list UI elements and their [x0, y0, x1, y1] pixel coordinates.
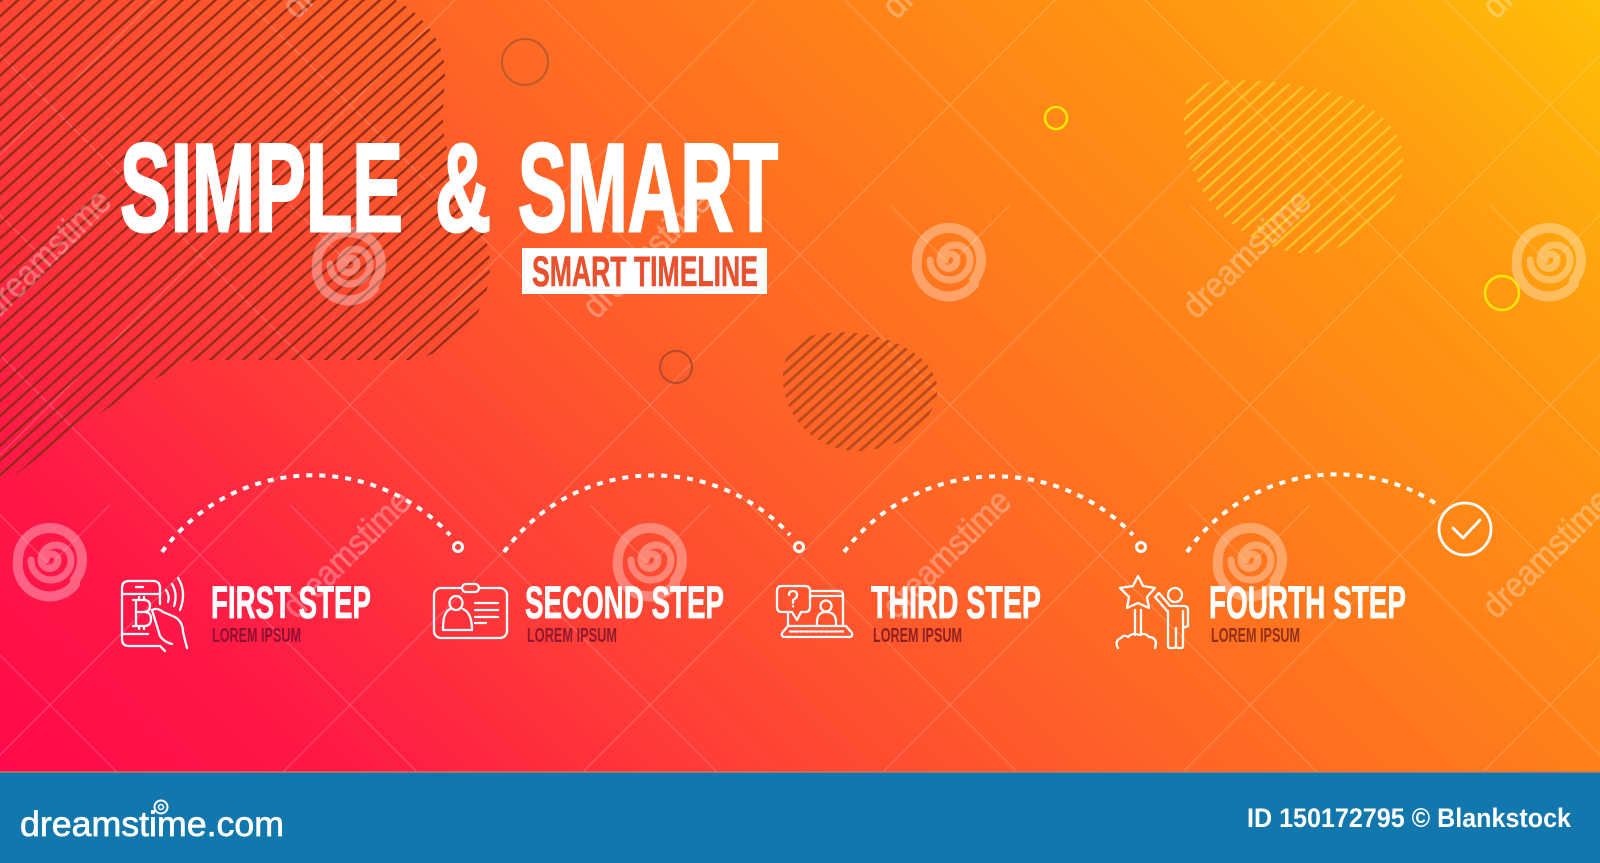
watermark text row: dreamstime — [273, 480, 419, 626]
timeline node 2 — [794, 542, 804, 552]
watermark text row — [0, 0, 1600, 626]
watermark text row: dreamstime — [873, 480, 1019, 626]
timeline node 1 — [454, 542, 462, 552]
timeline dashed arcs — [162, 474, 1441, 552]
step 1 — [122, 577, 371, 651]
heading: second step: SECOND STEP — [525, 577, 724, 628]
icon: bitcoin phone — [122, 578, 187, 651]
footer image id credit: ID 150172795 © Blankstock — [1247, 803, 1572, 833]
hatched blob: large left — [0, 0, 490, 487]
subtitle label: SMART TIMELINE — [532, 248, 758, 296]
caption: second step: LOREM IPSUM — [527, 625, 617, 647]
timeline node 3 — [1136, 542, 1146, 552]
watermark text row: dreamstime — [573, 180, 719, 326]
heading: first step: FIRST STEP — [211, 577, 371, 628]
decorative circle: small yellow — [1045, 107, 1067, 129]
decorative circle: top dark — [502, 39, 548, 85]
step 2 — [434, 577, 724, 647]
title: SIMPLE — [120, 119, 403, 258]
icon: check circle — [1439, 503, 1491, 555]
hatched blob: yellow right — [1184, 80, 1403, 253]
title: SMART — [518, 119, 778, 258]
hatched blob: center — [783, 332, 937, 451]
watermark spirals — [18, 228, 1581, 596]
decorative circle: center dark — [660, 351, 692, 383]
step 3 — [777, 577, 1041, 647]
icon: id card — [434, 584, 507, 638]
decorative circle: large yellow — [1485, 276, 1519, 310]
footer band — [0, 771, 1600, 863]
caption: fourth step: LOREM IPSUM — [1211, 625, 1300, 647]
watermark text row: dreamstime — [1173, 180, 1319, 326]
step 4 — [1117, 576, 1406, 648]
caption: third step: LOREM IPSUM — [873, 625, 962, 647]
icon: laptop support — [777, 586, 852, 637]
subtitle label — [522, 248, 767, 296]
heading: fourth step: FOURTH STEP — [1209, 577, 1406, 628]
title: & — [435, 119, 491, 258]
heading: third step: THIRD STEP — [871, 577, 1041, 628]
footer logo: dreamstime.com — [20, 805, 284, 844]
icon: star and person — [1117, 576, 1188, 648]
caption: first step: LOREM IPSUM — [212, 625, 301, 647]
